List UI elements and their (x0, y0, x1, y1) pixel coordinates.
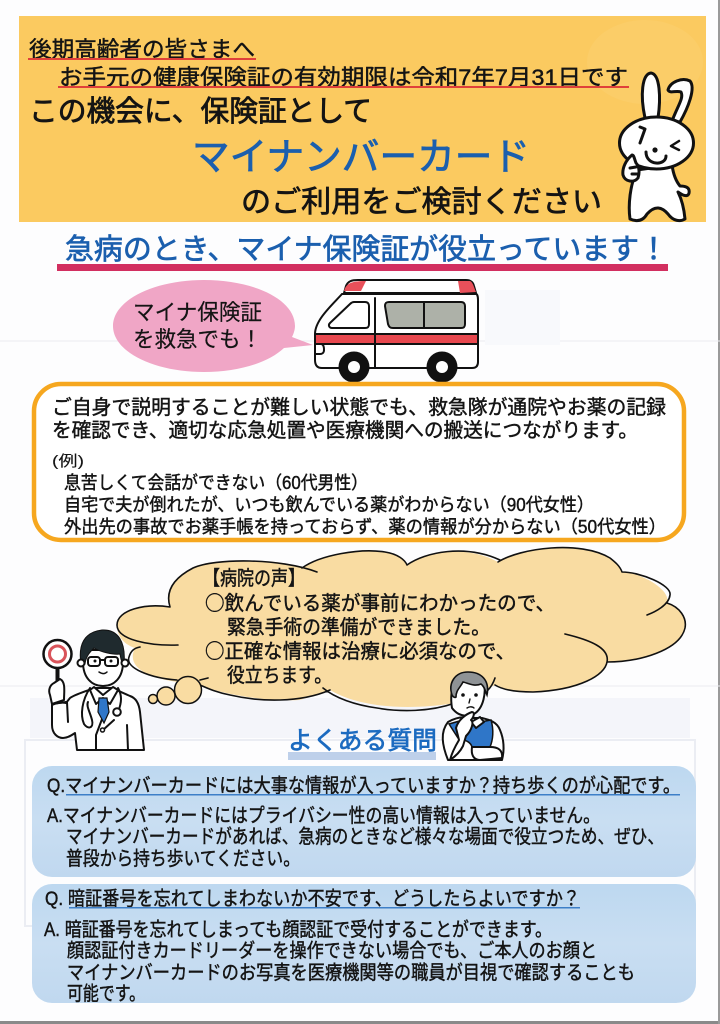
explanation text (52, 396, 666, 442)
examples list: (例) (52, 453, 84, 470)
answer 2 (44, 919, 635, 1005)
answer 2: 顔認証付きカードリーダーを操作できない場合でも、ご本人のお顔と (67, 940, 597, 962)
thought bubbles (148, 676, 202, 705)
explanation text: を確認でき、適切な応急処置や医療機関への搬送につながります。 (52, 419, 638, 442)
examples list: 外出先の事故でお薬手帳を持っておらず、薬の情報が分からない（50代女性） (64, 517, 666, 537)
hospital voices text: ○正確な情報は治療に必須なので、 (205, 635, 515, 664)
banner greeting: 後期高齢者の皆さまへ (29, 37, 255, 62)
expiry notice: お手元の健康保険証の有効期限は令和7年7月31日です (59, 65, 628, 90)
icon: thinking man (443, 672, 504, 760)
cloud: hospital voices (117, 548, 685, 711)
panel: FAQ 1 (32, 766, 696, 877)
answer 1: 普段から持ち歩いてください。 (66, 848, 300, 870)
examples list: 息苦しくて会話ができない（60代男性） (64, 473, 368, 493)
panel: FAQ 2 (32, 884, 696, 1005)
explanation text: ご自身で説明することが難しい状態でも、救急隊が通院やお薬の記録 (52, 396, 666, 419)
speech bubble: pink: マイナ保険証 (133, 300, 262, 325)
section heading: 急病のとき、マイナ保険証が役立っています！ (65, 233, 668, 266)
panel: emergency explanation (34, 384, 684, 540)
FAQ heading: よくある質問 (288, 727, 437, 755)
icon: ambulance (315, 280, 478, 382)
answer 1 (47, 805, 664, 870)
hospital voices text: 【病院の声】 (203, 567, 305, 590)
question 2: Q. 暗証番号を忘れてしまわないか不安です、どうしたらよいですか？ (45, 888, 580, 910)
icon: doctor holding circle sign (44, 630, 144, 750)
icon: rabbit mascot (620, 73, 694, 221)
answer 2: A. 暗証番号を忘れてしまっても顔認証で受付することができます。 (44, 919, 552, 941)
banner panel (19, 16, 706, 222)
examples list (52, 453, 666, 537)
answer 1: A.マイナンバーカードにはプライバシー性の高い情報は入っていません。 (47, 805, 600, 827)
hospital voices text: 緊急手術の準備ができました。 (227, 616, 490, 639)
speech bubble: pink (113, 280, 313, 372)
hospital voices text (203, 567, 555, 687)
banner headline my number card: マイナンバーカード (192, 137, 530, 179)
hospital voices text: ○飲んでいる薬が事前にわかったので、 (205, 587, 555, 616)
answer 2: 可能です。 (67, 983, 145, 1005)
banner headline line 3: のご利用をご検討ください (241, 186, 602, 219)
banner headline line 1: この機会に、保険証として (29, 95, 372, 128)
answer 2: マイナンバーカードのお写真を医療機関等の職員が目視で確認することも (67, 962, 635, 984)
examples list: 自宅で夫が倒れたが、いつも飲んでいる薬がわからない（90代女性） (64, 495, 594, 515)
hospital voices text: 役立ちます。 (227, 664, 332, 687)
speech bubble: pink: を救急でも！ (133, 327, 262, 352)
